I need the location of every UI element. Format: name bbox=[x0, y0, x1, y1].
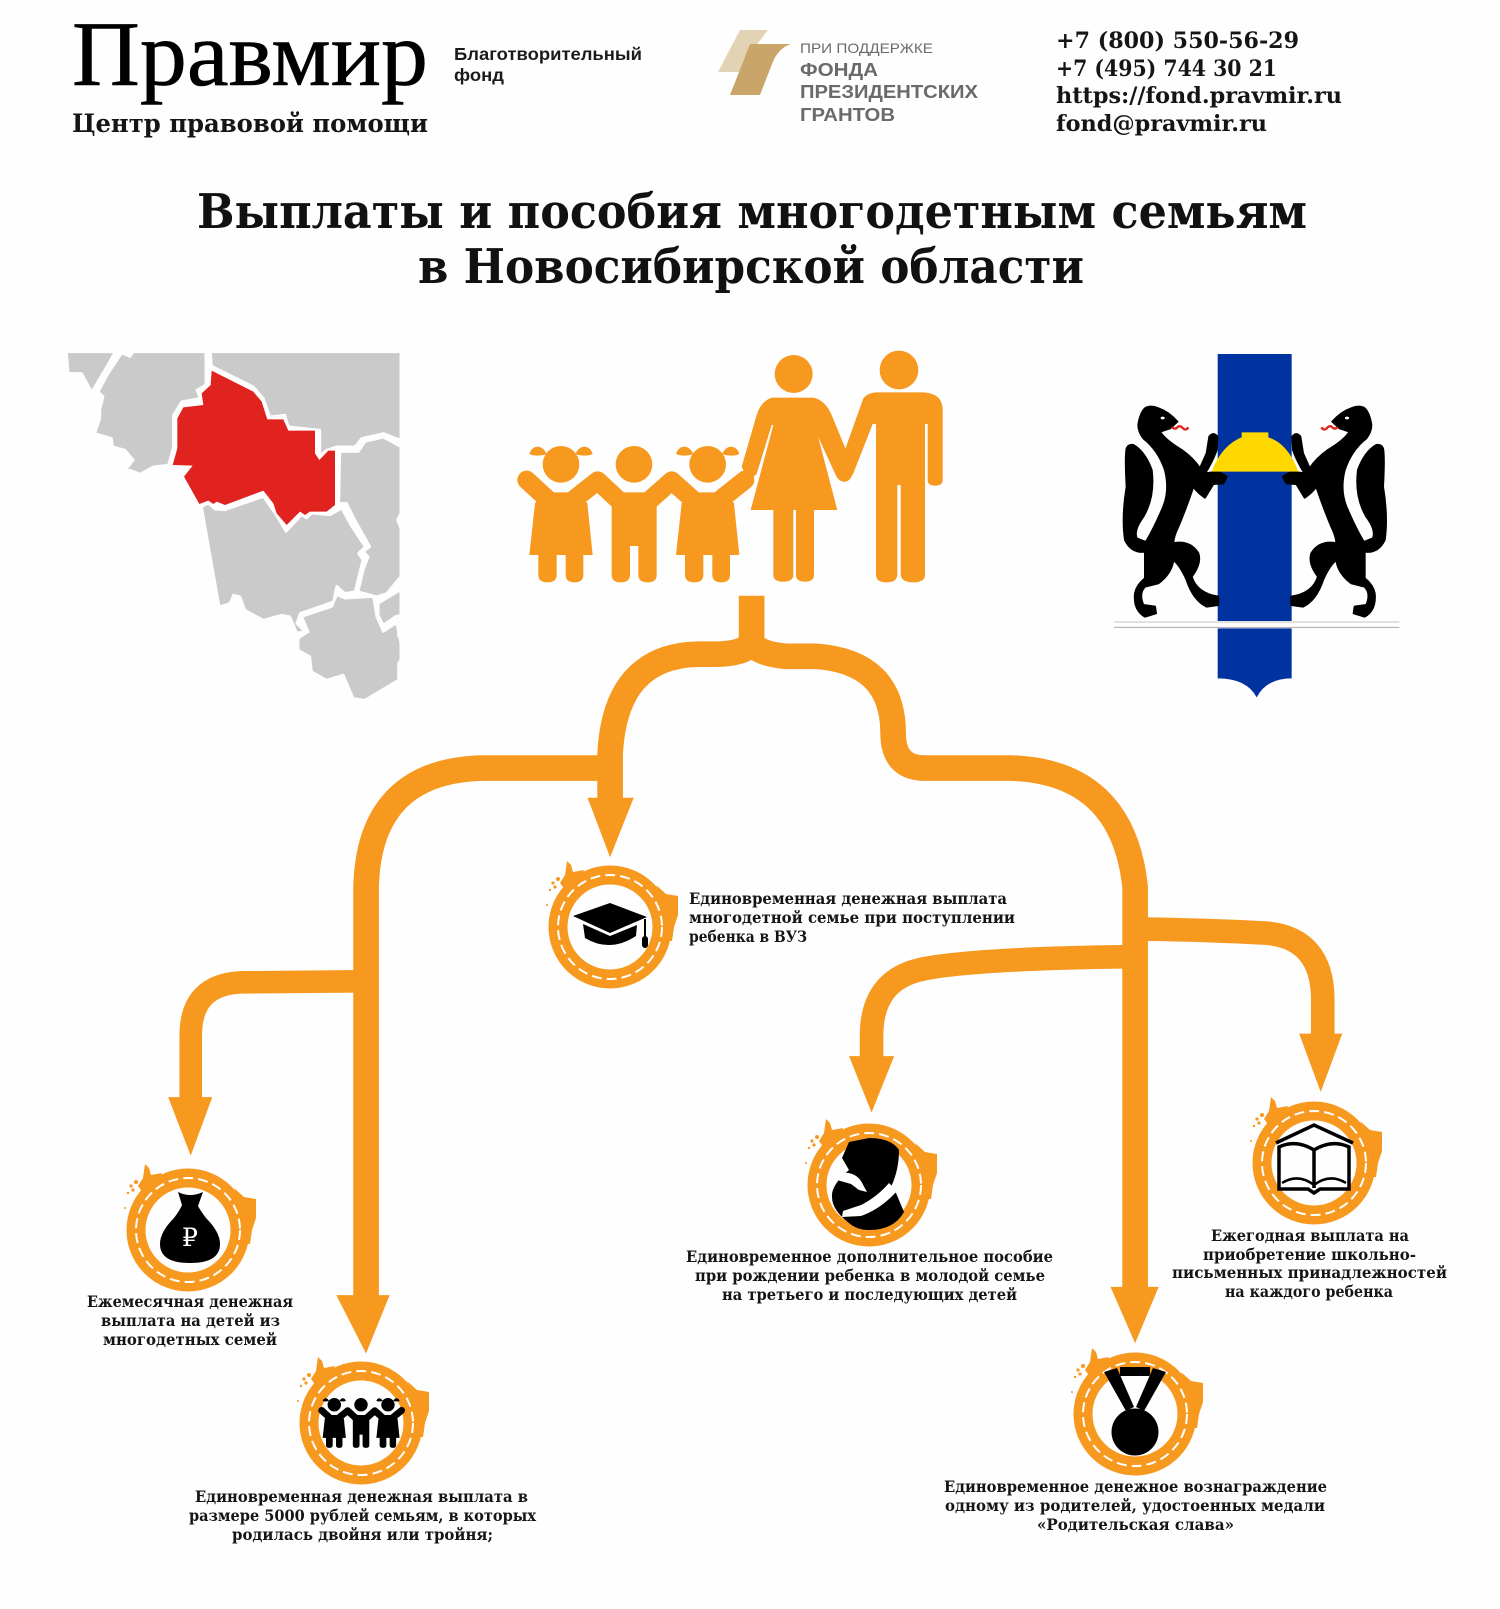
caption: ребенка в ВУЗ bbox=[689, 927, 807, 946]
caption: на третьего и последующих детей bbox=[722, 1285, 1017, 1304]
header: Pravmir logo: Правмир bbox=[72, 3, 428, 105]
children bbox=[527, 446, 745, 582]
stem bbox=[610, 596, 752, 805]
subtitle: legal aid centre: Центр правовой помощи bbox=[72, 109, 428, 138]
caption: «Родительская слава» bbox=[1037, 1515, 1234, 1534]
charity fund label: Благотворительный bbox=[454, 44, 642, 64]
arrow: to the university payment bbox=[588, 798, 634, 857]
caption bbox=[686, 1247, 1053, 1304]
caption: размере 5000 рублей семьям, в которых bbox=[189, 1506, 537, 1525]
title bbox=[197, 184, 1307, 295]
item: twins payment bbox=[189, 1357, 537, 1544]
icon: three children bbox=[297, 1357, 429, 1475]
caption bbox=[189, 1487, 537, 1544]
icon: medal bbox=[1071, 1348, 1203, 1466]
icon: money bag bbox=[124, 1164, 256, 1282]
item: university payment bbox=[546, 861, 1015, 979]
charity fund label bbox=[454, 44, 642, 85]
caption bbox=[944, 1477, 1327, 1534]
caption: письменных принадлежностей bbox=[1172, 1263, 1447, 1282]
icon: pregnant woman bbox=[805, 1119, 937, 1237]
title: Выплаты и пособия многодетным семьям bbox=[197, 184, 1307, 240]
coat of arms bbox=[1114, 354, 1399, 697]
caption: Ежегодная выплата на bbox=[1211, 1226, 1409, 1245]
map of the region bbox=[67, 352, 401, 700]
caption: Единовременное денежное вознаграждение bbox=[944, 1477, 1327, 1496]
caption: родилась двойня или тройня; bbox=[232, 1525, 493, 1544]
item: third child allowance bbox=[686, 1119, 1053, 1304]
caption: выплата на детей из bbox=[101, 1311, 280, 1330]
woman bbox=[742, 355, 853, 582]
presidential grants fund logo: ФОНДА bbox=[800, 59, 878, 80]
presidential grants fund logo bbox=[718, 30, 979, 125]
contacts: fond@pravmir.ru bbox=[1056, 111, 1267, 137]
contacts: +7 (800) 550-56-29 bbox=[1056, 28, 1299, 54]
item: school supplies payment bbox=[1172, 1097, 1447, 1301]
caption: приобретение школьно- bbox=[1203, 1245, 1416, 1264]
presidential grants fund logo: ПРЕЗИДЕНТСКИХ bbox=[800, 81, 979, 102]
contacts bbox=[1056, 28, 1342, 137]
caption: многодетных семей bbox=[103, 1330, 277, 1349]
flow arrows bbox=[168, 596, 1342, 1354]
presidential grants fund logo: ГРАНТОВ bbox=[800, 104, 895, 125]
man bbox=[837, 351, 943, 582]
caption: многодетной семье при поступлении bbox=[689, 908, 1015, 927]
caption: Единовременное дополнительное пособие bbox=[686, 1247, 1053, 1266]
caption: Единовременная денежная выплата bbox=[689, 889, 1007, 908]
caption bbox=[689, 889, 1015, 946]
arrow: to medal award bbox=[1111, 1287, 1159, 1343]
contacts: https://fond.pravmir.ru bbox=[1056, 83, 1342, 109]
item: medal award bbox=[944, 1348, 1327, 1534]
arrow: to monthly payment bbox=[168, 981, 359, 1156]
caption bbox=[87, 1292, 293, 1349]
arrow: to school supplies bbox=[1140, 929, 1342, 1092]
icon: money bag: ₽ bbox=[182, 1223, 198, 1252]
caption: при рождении ребенка в молодой семье bbox=[695, 1266, 1045, 1285]
arrow: to twins payment bbox=[336, 768, 605, 1354]
charity fund label: фонд bbox=[454, 65, 504, 85]
Novosibirsk region highlighted bbox=[173, 371, 335, 525]
contacts: +7 (495) 744 30 21 bbox=[1056, 56, 1277, 82]
item: monthly payment bbox=[87, 1164, 293, 1349]
presidential grants fund logo: ПРИ ПОДДЕРЖКЕ bbox=[800, 40, 933, 56]
icon: book with roof bbox=[1250, 1097, 1382, 1215]
icon: family bbox=[527, 351, 943, 582]
caption: Ежемесячная денежная bbox=[87, 1292, 293, 1311]
caption: одному из родителей, удостоенных медали bbox=[945, 1496, 1325, 1515]
caption bbox=[1172, 1226, 1447, 1301]
caption: на каждого ребенка bbox=[1225, 1282, 1393, 1301]
arrow: to birth allowance bbox=[849, 957, 1128, 1113]
title: в Новосибирской области bbox=[418, 239, 1084, 295]
icon: graduation cap bbox=[546, 861, 678, 979]
caption: Единовременная денежная выплата в bbox=[195, 1487, 528, 1506]
